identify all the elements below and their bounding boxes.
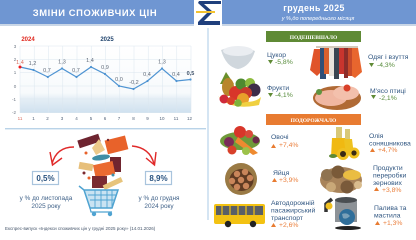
banner: rose: ПОДОРОЖЧАЛО — [291, 118, 337, 124]
callout: year change — [146, 172, 172, 184]
item: eggs — [272, 169, 298, 184]
line chart: 0,4 — [172, 72, 180, 78]
item: fuel: Палива та — [374, 205, 407, 212]
text: to December: у % до грудня — [138, 195, 180, 202]
date heading: грудень 2025 — [283, 3, 345, 13]
icon: bus — [214, 204, 265, 227]
item: fruits: Фрукти — [267, 85, 289, 92]
item: fuel — [374, 205, 407, 227]
header: date band — [222, 0, 416, 26]
line chart: -1 — [12, 97, 16, 102]
item: fruits: -4,1% — [275, 92, 293, 99]
line chart: 0,4 — [143, 72, 151, 78]
line chart: 1,4 — [16, 60, 24, 66]
line chart: -0,2 — [129, 80, 139, 86]
item: poultry: -2,1% — [379, 95, 397, 102]
item: cereal products — [373, 165, 406, 194]
line chart: 1,3 — [58, 60, 66, 66]
item: clothes: Одяг і взуття — [368, 53, 409, 61]
subheading: у %,до попереднього місяця — [281, 16, 354, 22]
item: cereal products: переробки — [373, 172, 406, 180]
arrow: right — [132, 146, 156, 165]
line chart: 10 — [159, 116, 165, 121]
line chart: 5 — [90, 116, 93, 121]
item: cereal products: +3,8% — [382, 187, 401, 194]
callout: year change: 8,9% — [149, 174, 168, 183]
item: sugar: Цукор — [267, 52, 286, 59]
banner: fell — [266, 31, 361, 42]
text: to December: 2024 року — [144, 203, 174, 210]
icon: eggs in basket — [225, 163, 257, 195]
item: fruits — [267, 85, 293, 99]
item: vegetables — [271, 133, 298, 149]
line chart: 2 — [14, 57, 17, 62]
item: cereal products: зернових — [373, 180, 403, 187]
line chart: 6 — [104, 116, 107, 121]
item: vegetables: Овочі — [271, 133, 289, 141]
item: sunflower oil: соняшникова — [369, 140, 411, 148]
text: to December — [138, 195, 180, 210]
line chart: 1,3 — [158, 60, 166, 66]
callout: month change — [32, 172, 58, 184]
line chart: 1 — [32, 116, 35, 121]
line chart: 0,9 — [101, 65, 109, 71]
line chart: 1,4 — [86, 58, 94, 64]
item: road transport — [271, 199, 315, 229]
line chart: 4 — [75, 116, 78, 121]
item: road transport: Автодорожній — [271, 199, 315, 207]
line chart — [12, 37, 194, 121]
item: clothes: -4,3% — [377, 62, 395, 69]
line chart: 0,0 — [115, 77, 123, 83]
line chart: 3 — [61, 116, 64, 121]
icon: clothes — [310, 47, 362, 79]
icon: shopping cart with goods — [77, 134, 128, 216]
line chart: 11 — [174, 116, 179, 121]
icon: fruits — [218, 72, 261, 107]
item: poultry: М'ясо птиці — [370, 87, 406, 95]
banner: rose — [266, 114, 361, 125]
line chart: 7 — [118, 116, 121, 121]
icon: logo — [194, 0, 222, 26]
line chart: 8 — [132, 116, 135, 121]
line chart: 0 — [14, 84, 17, 89]
item: eggs: Яйця — [273, 169, 290, 177]
item: road transport: транспорт — [271, 215, 303, 222]
year label 2025: 2025 — [100, 37, 114, 43]
item: road transport: +2,6% — [279, 222, 298, 229]
title: ЗМІНИ СПОЖИВЧИХ ЦІН — [33, 7, 157, 18]
line chart: 12 — [187, 116, 192, 121]
text: to November: 2025 року — [31, 203, 61, 210]
line chart: -2 — [12, 110, 16, 115]
item: sugar — [267, 52, 293, 66]
icon: cereal products — [320, 166, 362, 194]
item: sunflower oil: Олія — [369, 132, 384, 140]
line chart: 0,7 — [43, 68, 51, 74]
item: eggs: +3,9% — [279, 177, 298, 184]
line chart: 11 — [18, 116, 23, 121]
item: sunflower oil: +4,7% — [378, 147, 397, 154]
banner: fell: ПОДЕШЕВШАЛО — [290, 35, 338, 41]
line chart: 9 — [146, 116, 149, 121]
arrow: left — [50, 147, 74, 165]
item: cereal products: Продукти — [373, 165, 403, 172]
item: fuel: мастила — [374, 212, 401, 220]
item: clothes — [368, 53, 409, 69]
year label 2024: 2024 — [21, 37, 35, 43]
line chart: 1,2 — [29, 61, 36, 67]
header: title band — [0, 0, 194, 26]
footer note: Експрес-випуск «Індекси споживчих цін у грудні 2025 року» (14.01.2026) — [5, 226, 156, 231]
icon: fuel barrel and globe — [326, 197, 361, 230]
item: poultry — [370, 87, 406, 102]
line chart: 3 — [14, 44, 17, 49]
item: sugar: -5,8% — [275, 59, 293, 66]
panel: prices rose — [214, 114, 411, 230]
icon: vegetables — [220, 126, 260, 155]
icon: sugar — [221, 46, 255, 69]
text: to November — [20, 195, 73, 210]
item: vegetables: +7,4% — [279, 142, 298, 149]
icon: poultry — [313, 84, 361, 110]
item: fuel: +1,3% — [383, 220, 402, 227]
panel: prices fell — [218, 31, 409, 110]
item: sunflower oil — [369, 132, 411, 154]
line chart: 2 — [46, 116, 49, 121]
line chart: 0,7 — [72, 68, 80, 74]
callout: month change: 0,5% — [36, 174, 55, 183]
icon: sunflower oil — [329, 127, 360, 160]
text: to November: у % до листопада — [20, 195, 73, 202]
line chart: 1 — [14, 70, 17, 75]
item: road transport: пасажирський — [271, 206, 315, 214]
line chart: 0,5 — [187, 71, 194, 77]
